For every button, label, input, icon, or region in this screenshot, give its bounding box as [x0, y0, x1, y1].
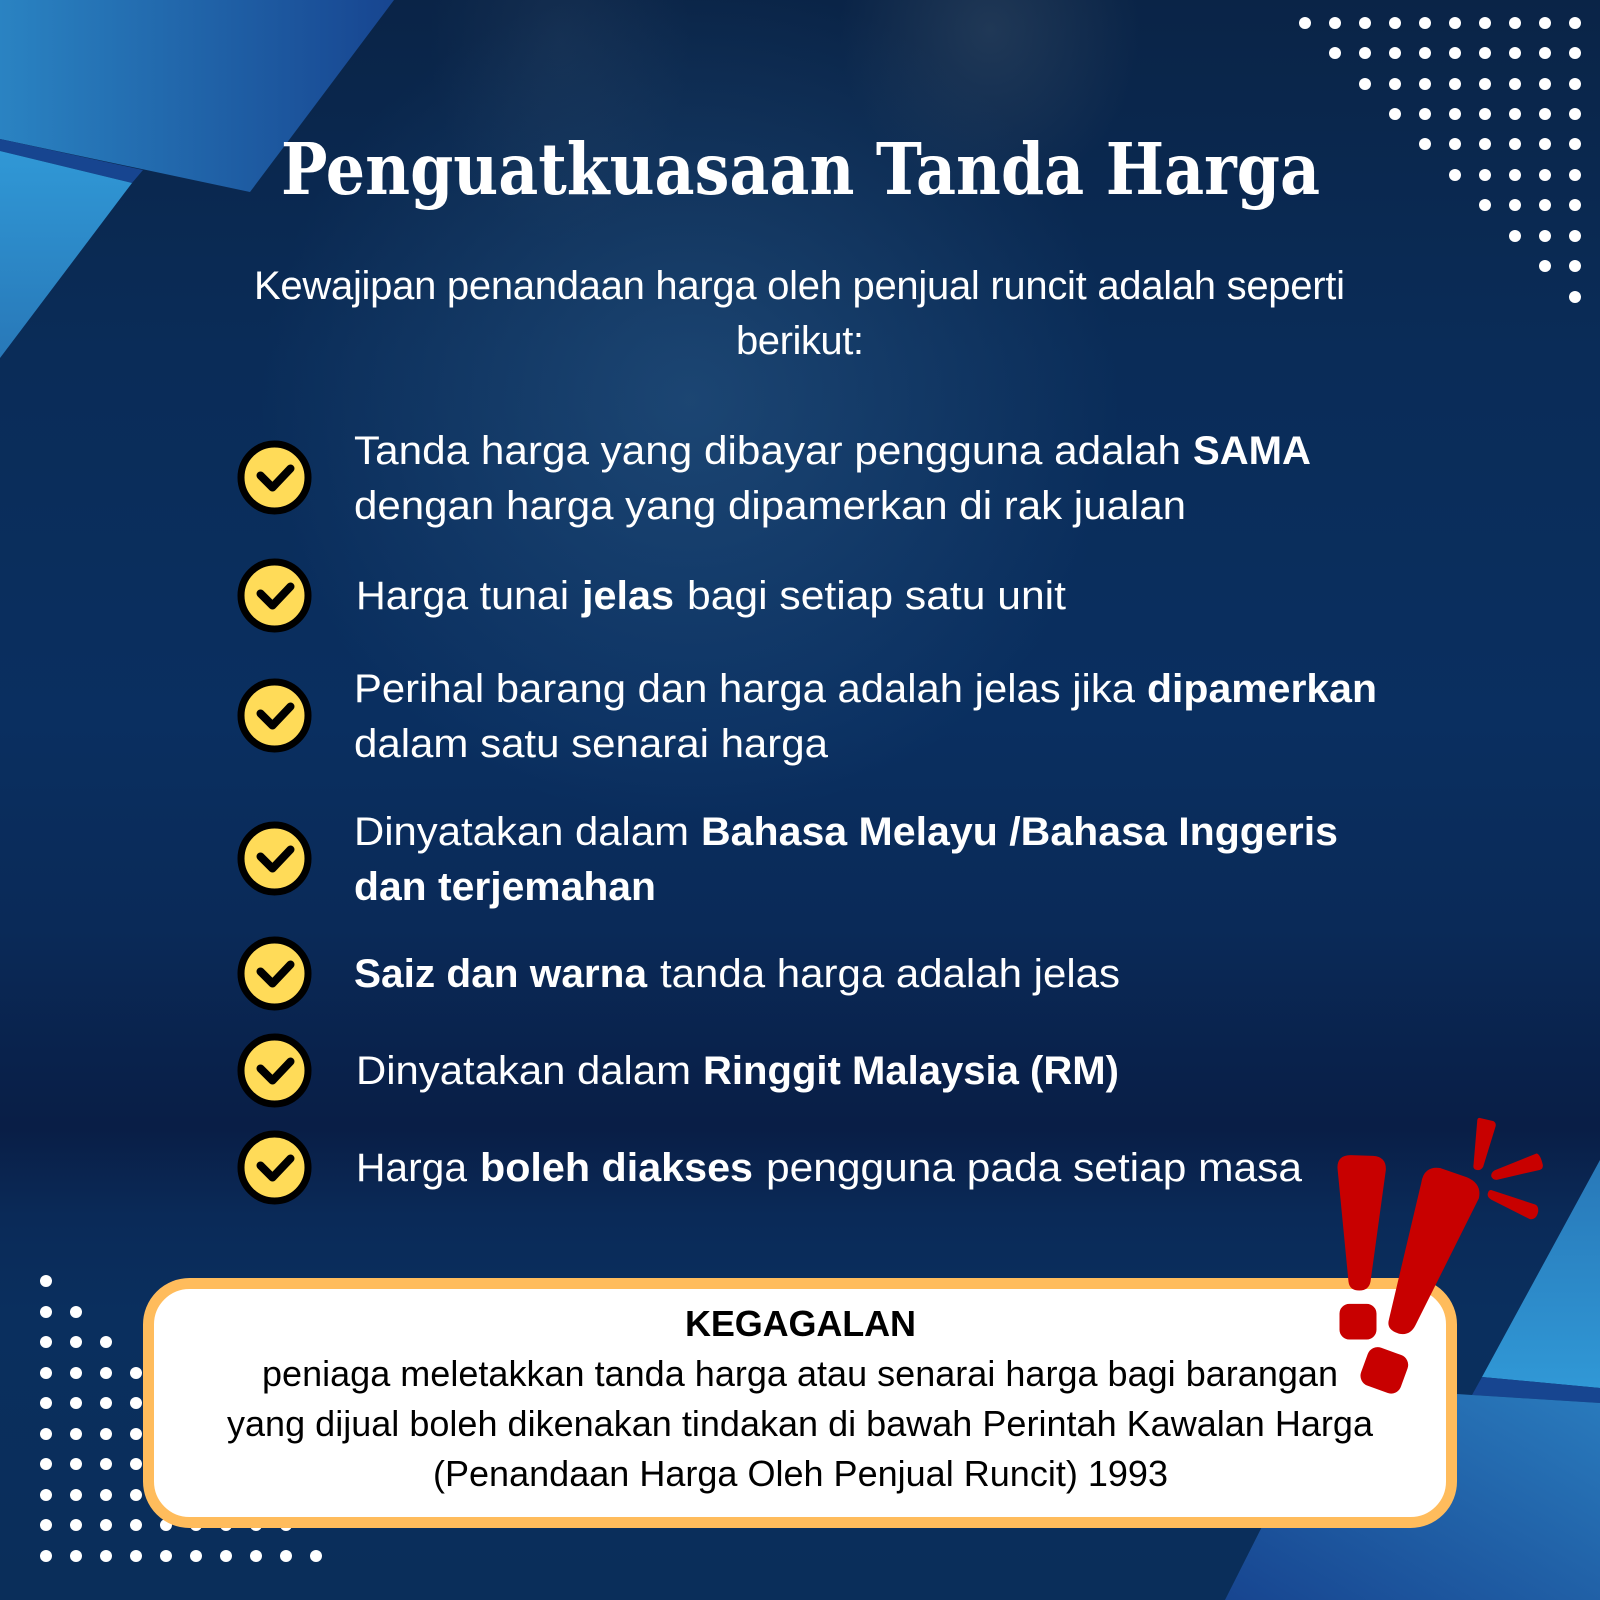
item 4: dan terjemahan: [354, 865, 656, 909]
title: Penguatkuasaan Tanda Harga: [281, 127, 1320, 211]
item 1: Tanda harga yang dibayar pengguna adalah: [354, 429, 1181, 473]
icon: red exclamation marks: [1338, 1118, 1542, 1396]
intro text: [254, 264, 1345, 363]
item 3: Perihal barang dan harga adalah jelas jika: [354, 667, 1136, 711]
item 1: dengan harga yang dipamerkan di rak jualan: [354, 484, 1186, 528]
item 4: Dinyatakan dalam: [354, 810, 689, 854]
item 6: Dinyatakan dalam: [356, 1049, 691, 1093]
item 5: Saiz dan warna: [354, 952, 648, 996]
item 1: [241, 429, 1311, 528]
callout: kegagalan: [148, 1284, 1452, 1522]
intro text: berikut:: [736, 319, 864, 363]
item 3: dalam satu senarai harga: [354, 722, 829, 766]
top-left geometric shapes: [0, 0, 394, 358]
dot pattern: bottom left: [40, 1275, 322, 1562]
item 3: [241, 667, 1377, 766]
item 2: Harga tunai: [356, 574, 569, 618]
item 7: Harga: [356, 1146, 468, 1190]
item 5: [241, 940, 1120, 1007]
callout body: peniaga meletakkan tanda harga atau senarai harga bagi barangan: [262, 1353, 1338, 1394]
item 7: boleh diakses: [480, 1146, 753, 1190]
item 2: jelas: [581, 574, 674, 618]
item 4: [241, 810, 1338, 909]
dot pattern: top right: [1299, 17, 1581, 303]
item 6: Ringgit Malaysia (RM): [703, 1049, 1119, 1093]
item 6: [241, 1037, 1119, 1104]
intro text: Kewajipan penandaan harga oleh penjual runcit adalah seperti: [254, 264, 1345, 308]
item 2: bagi setiap satu unit: [687, 574, 1066, 618]
item 7: [241, 1134, 1303, 1201]
callout body: [227, 1353, 1374, 1494]
item 5: tanda harga adalah jelas: [660, 952, 1120, 996]
bottom-right geometric shapes: [1225, 1160, 1600, 1600]
callout body: yang dijual boleh dikenakan tindakan di bawah Perintah Kawalan Harga: [227, 1403, 1374, 1444]
item 4: Bahasa Melayu /Bahasa Inggeris: [701, 810, 1338, 854]
callout heading: KEGAGALAN: [685, 1303, 916, 1344]
item 7: pengguna pada setiap masa: [766, 1146, 1303, 1190]
callout body: (Penandaan Harga Oleh Penjual Runcit) 1993: [433, 1453, 1168, 1494]
item 3: dipamerkan: [1147, 667, 1377, 711]
item 1: SAMA: [1193, 429, 1311, 473]
item 2: [241, 562, 1066, 629]
checklist: [241, 429, 1377, 1201]
